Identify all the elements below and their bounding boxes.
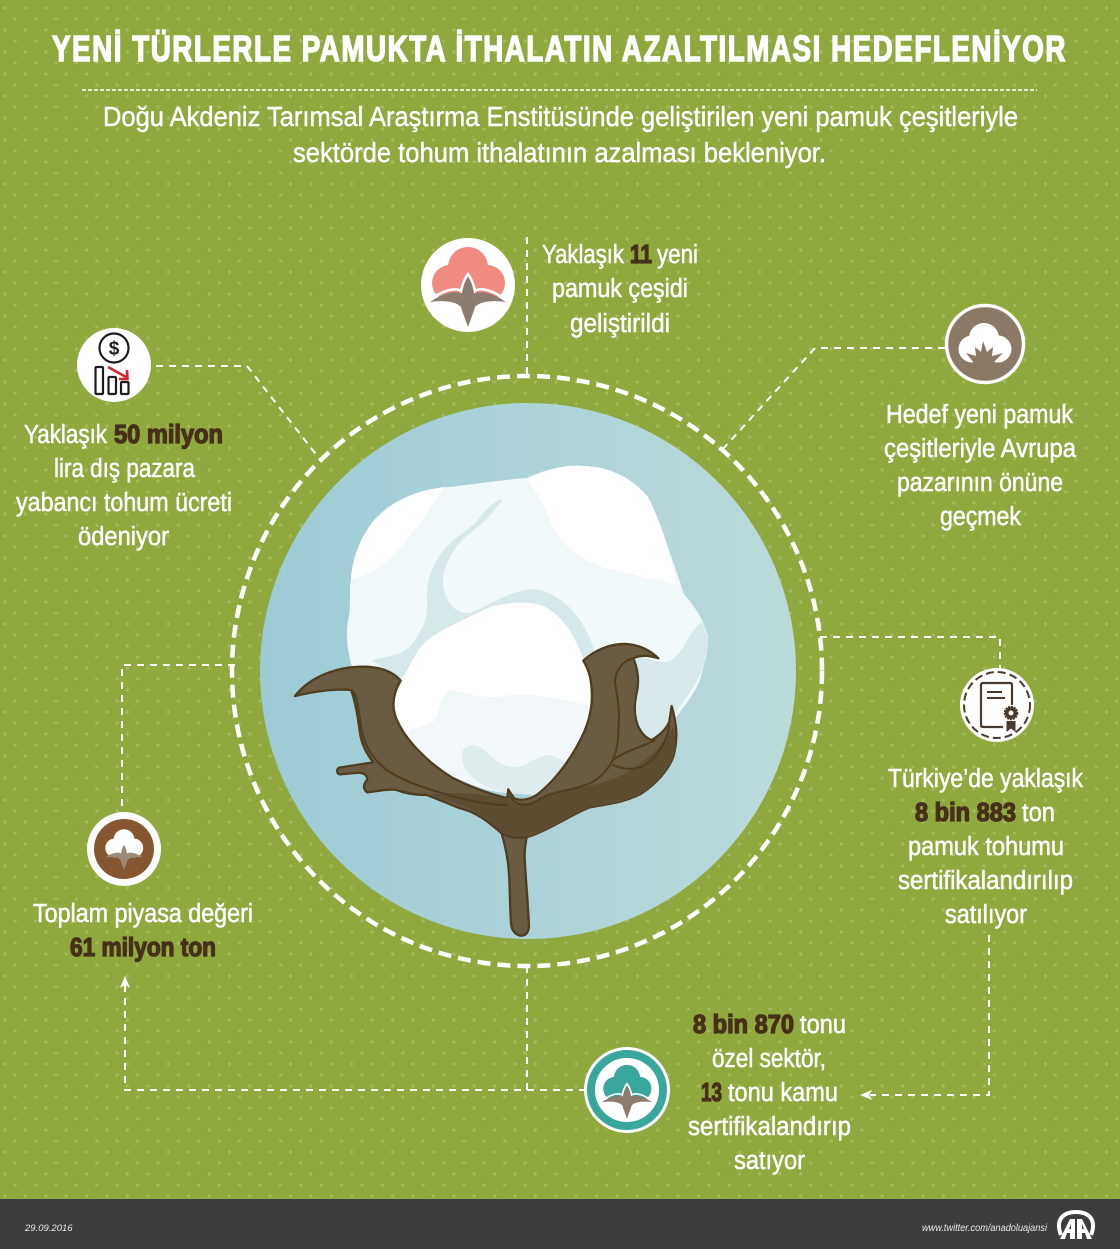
text: 11 varieties: 11 — [630, 241, 652, 269]
back cotton — [347, 466, 708, 745]
subtitle — [103, 101, 1018, 168]
text: 8 bin 883 tons: sertifikalandırılıp — [898, 867, 1073, 895]
text: market value: Toplam piyasa değeri — [33, 900, 253, 928]
subtitle: Doğu Akdeniz Tarımsal Araştırma Enstitüsünde geliştirilen yeni pamuk çeşitleriyle — [103, 101, 1018, 132]
connector: certificate to private sector — [870, 935, 989, 1095]
logo: AA — [1059, 1212, 1093, 1239]
text: private and public sector: tonu — [800, 1011, 846, 1039]
cotton lobe upper right — [527, 466, 677, 585]
front cotton — [393, 603, 592, 795]
text: 11 varieties: pamuk çeşidi — [552, 275, 688, 303]
text: 50 million: 50 milyon — [114, 421, 223, 449]
footer date: 29.09.2016 — [24, 1223, 73, 1234]
text: private and public sector — [688, 1011, 851, 1175]
calyx and stem — [295, 644, 676, 936]
text: European market — [884, 401, 1077, 531]
arrow: left to private sector — [860, 1090, 872, 1100]
text: private and public sector: 8 bin 870 — [693, 1011, 794, 1039]
text: 11 varieties: Yaklaşık — [542, 241, 624, 269]
text: 50 million: yabancı tohum ücreti — [16, 489, 232, 517]
connector: money — [156, 366, 322, 462]
icon: taupe cotton — [946, 306, 1024, 382]
calyx inner lines — [352, 658, 669, 838]
icon: money and falling bars: $ — [109, 338, 120, 360]
text: 50 million: Yaklaşık — [24, 421, 107, 449]
connector: bottom to market value — [125, 966, 527, 1090]
connector: certificate — [820, 637, 1000, 668]
icon: money and falling bars — [77, 328, 151, 402]
text: 8 bin 883 tons: 8 bin 883 — [915, 799, 1016, 827]
text: 8 bin 883 tons — [888, 765, 1083, 929]
text: 50 million: lira dış pazara — [54, 455, 196, 483]
text: private and public sector: sertifikalandırıp — [688, 1113, 851, 1141]
text: private and public sector: tonu kamu — [728, 1079, 838, 1107]
subtitle: sektörde tohum ithalatının azalması bekleniyor. — [293, 137, 826, 168]
cotton lobe upper left — [350, 487, 445, 580]
text: 8 bin 883 tons: ton — [1022, 799, 1055, 827]
central circle — [260, 403, 796, 939]
front cotton shade — [407, 690, 590, 795]
text: market value — [33, 900, 253, 962]
title divider — [82, 89, 1037, 91]
text: 50 million — [16, 421, 232, 551]
icon: brown cotton — [87, 812, 161, 886]
text: 8 bin 883 tons: Türkiye’de yaklaşık — [888, 765, 1083, 793]
text: private and public sector: satıyor — [734, 1147, 805, 1175]
connector: top — [526, 237, 528, 376]
front cotton crease — [462, 745, 565, 795]
text: European market: geçmek — [940, 503, 1021, 531]
illustration: cotton boll — [295, 466, 708, 936]
text: private and public sector: özel sektör, — [712, 1045, 826, 1073]
cotton fold — [372, 499, 597, 680]
text: 8 bin 883 tons: pamuk tohumu — [908, 833, 1064, 861]
icon: certificate — [960, 668, 1034, 742]
connector: bottom to icon — [527, 1089, 584, 1091]
connector: left — [122, 665, 235, 810]
dashed ring — [232, 376, 822, 966]
text: 11 varieties — [542, 241, 698, 338]
text: European market: Hedef yeni pamuk — [886, 401, 1073, 429]
footer bar — [0, 1199, 1120, 1249]
arrow: up to market value — [120, 976, 130, 988]
text: 8 bin 883 tons: satılıyor — [945, 901, 1027, 929]
calyx lower shade — [427, 727, 675, 837]
text: European market: pazarının önüne — [897, 469, 1063, 497]
cotton shade right — [600, 622, 708, 745]
connector: upper right — [722, 348, 945, 450]
icon: teal cotton — [584, 1047, 670, 1133]
text: private and public sector: 13 — [701, 1079, 722, 1107]
text: 11 varieties: geliştirildi — [570, 310, 670, 338]
text: 11 varieties: yeni — [657, 241, 698, 269]
text: 50 million: ödeniyor — [78, 523, 169, 551]
footer url: www.twitter.com/anadoluajansi — [922, 1222, 1048, 1234]
text: market value: 61 milyon ton — [70, 934, 216, 962]
text: European market: çeşitleriyle Avrupa — [884, 435, 1077, 463]
icon: pink cotton — [421, 238, 515, 332]
